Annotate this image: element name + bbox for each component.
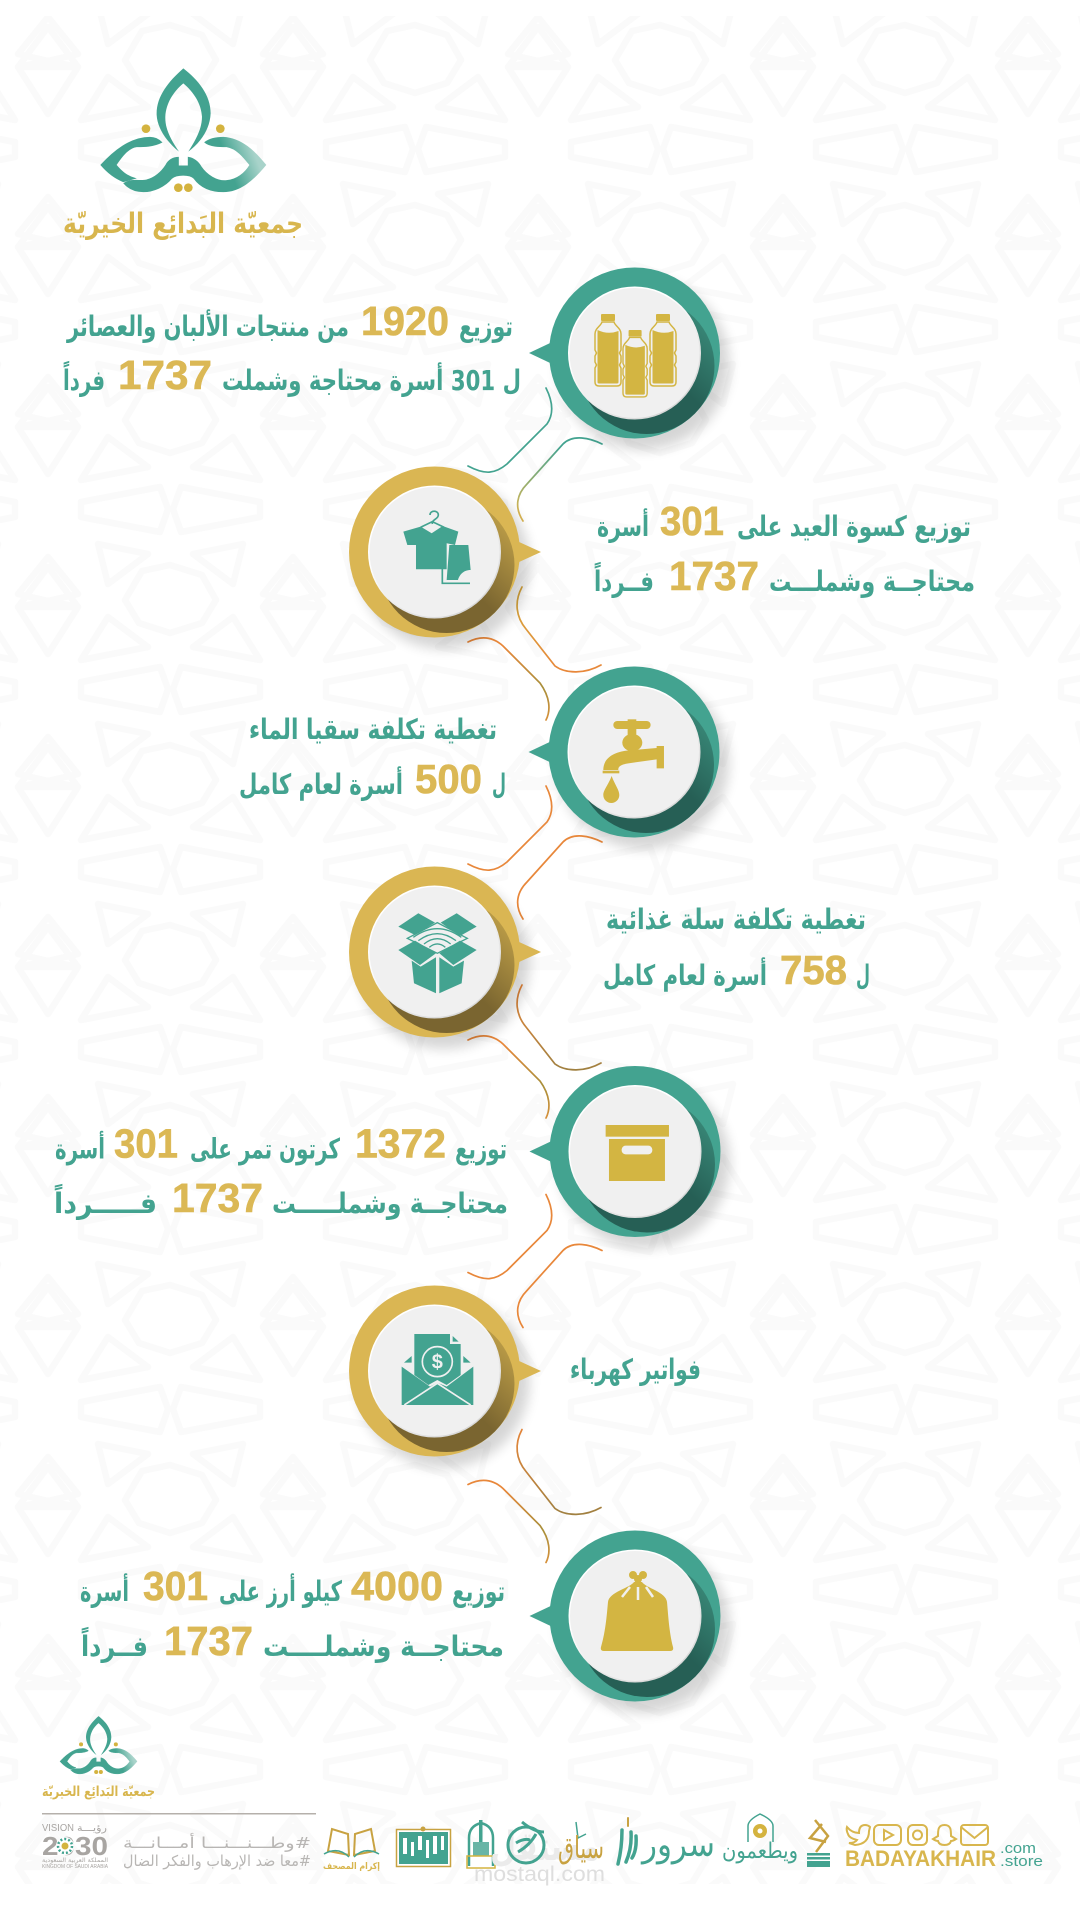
item 5 bubble: teal circle [530, 1066, 730, 1248]
text: item 4: 758 [780, 947, 847, 993]
icon: juice bottles [595, 314, 676, 397]
text: item 7: أسرة [80, 1573, 129, 1608]
connectors: between items 1 and 2 [468, 388, 602, 521]
partner logo: narrow calligraphy [618, 1818, 636, 1864]
partner logo: wayutimoon [722, 1814, 798, 1864]
text: item 7: فــرداً [81, 1626, 148, 1663]
item 1 bubble: teal circle [529, 268, 730, 450]
text: item 1: 1920 [361, 298, 449, 344]
connectors: between items 5 and 6 [468, 1194, 602, 1328]
vision 2030 logo: المملكة العربية السعودية [42, 1857, 108, 1864]
text: item 3: أسرة لعام كامل [239, 766, 403, 801]
text: item 5: 1372 [355, 1120, 446, 1166]
text: item 6: فواتير كهرباء [570, 1353, 701, 1386]
vision 2030 logo: KINGDOM OF SAUDI ARABIA [42, 1864, 109, 1870]
website text: .com [1000, 1840, 1036, 1857]
text: item 5: كرتون تمر على [190, 1132, 341, 1166]
vision 2030 logo: VISION [42, 1823, 74, 1834]
icon: rice sack [601, 1571, 673, 1651]
footer logo name: جمعيّة البَدائِع الخيريّة [42, 1784, 155, 1800]
text: item 3: تغطية تكلفة سقيا الماء [249, 713, 497, 746]
partner logo: siyaq [558, 1822, 604, 1866]
connectors: between items 6 and 7 [468, 1430, 601, 1562]
connectors: between items 4 and 5 [468, 985, 601, 1118]
text: item 5: أسرة [55, 1130, 105, 1166]
partner logo: round calligraphy [508, 1822, 544, 1863]
icon: bill envelope [402, 1334, 473, 1405]
partner logo: book [323, 1829, 380, 1872]
text: item 1: من منتجات الألبان والعصائر [66, 309, 349, 343]
text: item 7: 1737 [164, 1618, 253, 1664]
item 7 bubble: teal circle [530, 1530, 730, 1713]
icon: clothes on hanger [403, 511, 471, 583]
vision 2030 logo: 2030 [42, 1831, 108, 1861]
text: item 5: 301 [114, 1120, 178, 1166]
text: item 5: فـــــرداً [54, 1183, 157, 1220]
partner logo: kufic diamond [807, 1820, 830, 1867]
text: item 1 [63, 298, 521, 398]
watermark: mostaql [474, 1824, 605, 1886]
text: item 7: توزيع [452, 1575, 505, 1608]
text: item 2: 1737 [669, 553, 759, 599]
vision 2030 logo: رؤيـــة [77, 1823, 107, 1834]
text: item 7: 301 [143, 1563, 208, 1609]
text: item 2: توزيع كسوة العيد على [737, 510, 971, 543]
connectors: between items 2 and 3 [468, 587, 601, 720]
text: item 2: 301 [660, 498, 724, 544]
text: item 3: ل [492, 768, 506, 801]
text: item 4: ل [856, 959, 870, 992]
text: item 1: 1737 [118, 352, 212, 398]
item 4 bubble: gold circle [349, 866, 541, 1049]
icon: date carton [606, 1125, 669, 1181]
partner logo: book: إكرام المصحف [323, 1862, 380, 1872]
logo: charity emblem [101, 68, 266, 192]
watermark: mostaql: mostaql.com [474, 1863, 605, 1886]
item 6 bubble: gold circle [349, 1286, 541, 1468]
connectors: between items 3 and 4 [468, 786, 602, 919]
footer logo: small emblem [60, 1716, 137, 1774]
text: item 5: محتاجــة وشملـــــت [272, 1187, 508, 1220]
text: item 3 [239, 713, 506, 802]
text: item 7: كيلو أرز على [219, 1573, 342, 1608]
text: item 3: 500 [415, 756, 482, 802]
partner logo: kufic box [396, 1826, 450, 1866]
text: item 1: فرداً [63, 360, 105, 397]
hashtag slogans: ‏#معا ضد الإرهاب والفكر الضال [123, 1852, 311, 1870]
website text [845, 1840, 1043, 1871]
text: item 2: فــرداً [594, 561, 654, 598]
text: item 1: توزيع [459, 310, 513, 343]
website text: BADAYAKHAIR [845, 1846, 996, 1871]
partner logo: arch [467, 1820, 495, 1868]
hashtag slogans [123, 1833, 311, 1870]
icon: bill envelope: $ [432, 1352, 443, 1374]
vision 2030 logo [42, 1823, 109, 1870]
text: item 2 [594, 498, 975, 599]
text: item 1: ل 301 أسرة محتاجة وشملت [222, 362, 521, 397]
hashtag slogans: ‏#وطـــنـــنـــا أمـــانـــة [123, 1833, 311, 1852]
item 3 bubble: teal circle [528, 666, 729, 849]
text: item 2: محتاجــة وشملـــت [769, 565, 975, 598]
icon: open food box [398, 913, 477, 993]
text: item 4 [603, 903, 870, 993]
website text: .store [1000, 1853, 1043, 1870]
icon: water tap with drop [603, 719, 664, 803]
social media icons [847, 1825, 988, 1845]
partner logo: wayutimoon: ويطعمون [722, 1839, 798, 1864]
text: item 5: 1737 [172, 1175, 263, 1221]
text: item 2: أسرة [597, 508, 649, 543]
partner logo: siyaq: سياق [558, 1831, 604, 1866]
text: item 7: 4000 [351, 1563, 443, 1609]
logo name: جمعيّة البَدائِع الخيريّة [63, 207, 303, 240]
watermark: mostaql: مستقل [490, 1824, 600, 1870]
partner logo: suroor: سرور [640, 1825, 715, 1865]
text: item 4: أسرة لعام كامل [603, 957, 767, 992]
text: item 5 [54, 1120, 508, 1221]
text: item 7: محتاجــة وشملــــت [263, 1630, 504, 1663]
text: item 4: تغطية تكلفة سلة غذائية [606, 903, 866, 936]
text: item 7 [80, 1563, 505, 1664]
text: item 5: توزيع [455, 1132, 507, 1166]
item 2 bubble: gold circle [349, 466, 541, 649]
